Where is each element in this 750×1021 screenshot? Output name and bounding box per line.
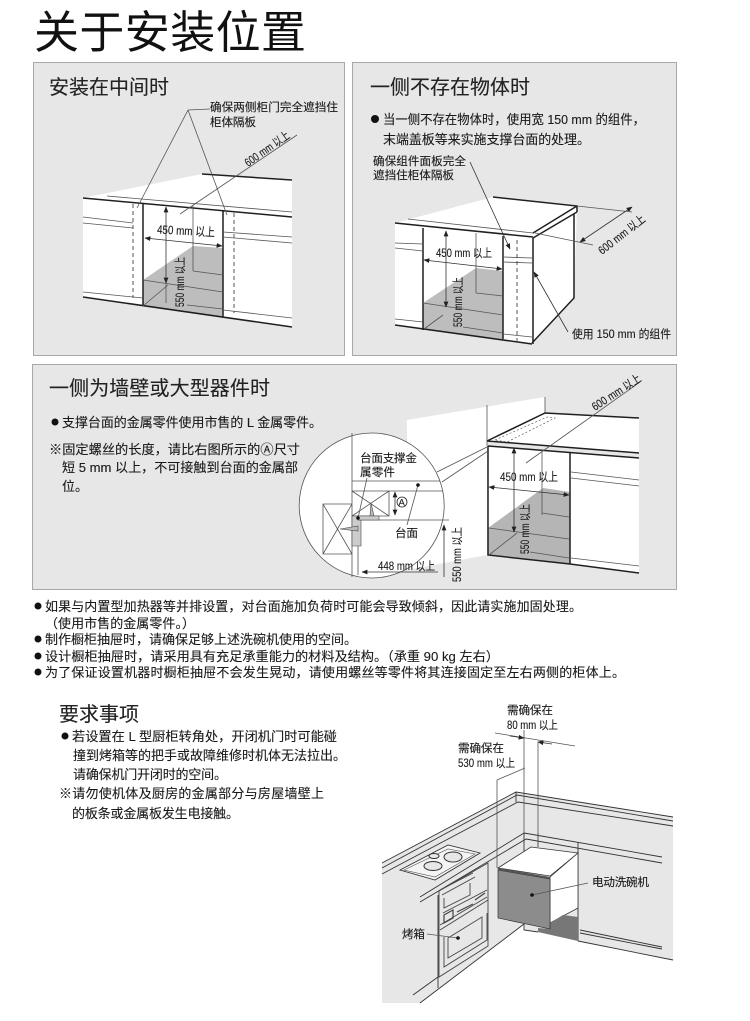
requirements text: 请确保机门开闭时的空间。 [73,767,227,782]
dimension lines: clearances [495,730,575,868]
label: clearance 530 mm: 530 mm 以上 [458,757,515,770]
callout: panel covers partition [373,154,510,249]
requirements text: ※请勿使机体及厨房的金属部分与房屋墙壁上 [59,786,324,801]
note text: screw length: 位。 [62,479,88,494]
label: bracket [360,451,417,479]
callout: panel covers partition: 确保组件面板完全 [373,154,466,168]
cabinet diagram: middle [83,129,297,327]
requirements heading: 要求事项 [59,703,139,726]
dimension: 448 mm: 448 mm 以上 [378,560,435,573]
requirements text [59,729,346,821]
notes list: 制作橱柜抽屉时，请确保足够上述洗碗机使用的空间。 [45,632,357,647]
panel: installed in the middle [34,62,344,356]
label: countertop: 台面 [395,526,418,540]
detail circle: bracket close-up [299,433,488,582]
dimension: 450 mm width: 450 mm 以上 [500,470,558,484]
label: bracket: 属零件 [360,465,395,479]
callout: 150 mm component [534,272,671,341]
notes list: 设计橱柜抽屉时，请采用具有充足承重能力的材料及结构。（承重 90 kg 左右） [45,649,499,664]
dimension: 450 mm width [424,247,502,269]
dishwasher [498,847,578,941]
panel heading: wall side: 一侧为墙壁或大型器件时 [49,377,270,400]
callout: door coverage: 柜体隔板 [210,115,256,129]
callout: panel covers partition: 遮挡住柜体隔板 [373,168,454,182]
dimension: 450 mm width [489,470,569,495]
dimension: 550 mm height: 550 mm 以上 [519,504,532,554]
dimension: 448 mm [362,560,438,573]
notes list [34,599,625,680]
dimension: 600 mm depth [526,372,644,463]
bullet text: 150 mm component [371,112,645,147]
label: clearance 80 mm [507,703,558,732]
dimension: 550 mm opening: 550 mm 以上 [451,527,464,582]
label: oven: 烤箱 [402,927,425,941]
dimension: 550 mm height: 550 mm 以上 [174,257,187,307]
callout: door coverage [137,100,338,215]
requirements text: 若设置在 L 型厨柜转角处，开闭机门时可能碰 [72,729,337,744]
label: clearance 530 mm [458,741,515,770]
cabinet diagram: one side empty [395,197,648,344]
panel heading: one side empty: 一侧不存在物体时 [370,76,530,99]
callout: door coverage: 确保两侧柜门完全遮挡住 [210,100,338,114]
dimension: 600 mm depth [180,129,297,214]
dimension: 550 mm opening [444,525,464,582]
notes list: 为了保证设置机器时橱柜抽屉不会发生晃动，请使用螺丝等零件将其连接固定至左右两侧的柜体上。 [45,665,625,680]
notes list: （使用市售的金属零件。） [45,616,195,631]
cabinet diagram: wall side [407,372,644,573]
dimension: 600 mm depth: 600 mm 以上 [596,213,648,257]
label: A dimension: A [398,498,406,508]
oven [439,863,488,977]
title: 关于安装位置 [34,7,306,58]
kitchen diagram [382,703,673,1003]
dimension: 550 mm height [514,448,532,554]
label: bracket: 台面支撑金 [360,451,417,465]
label: oven [402,927,460,941]
label: clearance 80 mm: 需确保在 [507,703,553,717]
note text: screw length: 短 5 mm 以上，不可接触到台面的金属部 [62,460,298,475]
dimension: 450 mm width: 450 mm 以上 [157,222,215,240]
label: clearance 80 mm: 80 mm 以上 [507,719,558,732]
requirements text: 撞到烤箱等的把手或故障维修时机体无法拉出。 [73,748,346,763]
dimension: 550 mm height: 550 mm 以上 [452,277,465,327]
note text: screw length: ※固定螺丝的长度，请比右图所示的Ⓐ尺寸 [49,442,300,457]
dimension: 600 mm depth: 600 mm 以上 [242,129,292,169]
dimension: 450 mm width [145,222,222,246]
label: dishwasher: 电动洗碗机 [592,875,649,889]
dimension: 450 mm width: 450 mm 以上 [436,247,492,260]
dimension: 550 mm height [446,231,465,327]
dimension: 550 mm height [166,207,187,307]
callout: 150 mm component: 使用 150 mm 的组件 [572,327,671,341]
label: A dimension [397,497,407,508]
dimension: 600 mm depth [535,206,648,257]
panel: one side empty [352,62,676,356]
bullet text: L bracket: 支撑台面的金属零件使用市售的 L 金属零件。 [62,415,322,430]
dimension: 600 mm depth: 600 mm 以上 [590,372,644,414]
notes list: 如果与内置型加热器等并排设置，对台面施加负荷时可能会导致倾斜，因此请实施加固处理。 [45,599,582,614]
note text: screw length [49,442,300,494]
hob [400,845,480,880]
bullet text: 150 mm component: 当一侧不存在物体时，使用宽 150 mm 的组件， [383,112,645,127]
bullet text: 150 mm component: 末端盖板等来实施支撑台面的处理。 [383,132,590,147]
requirements text: 的板条或金属板发生电接触。 [72,806,239,821]
panel: wall or large appliance on one side [32,364,676,590]
panel heading: middle: 安装在中间时 [49,76,169,99]
label: clearance 530 mm: 需确保在 [458,741,504,755]
label: dishwasher [530,875,649,897]
